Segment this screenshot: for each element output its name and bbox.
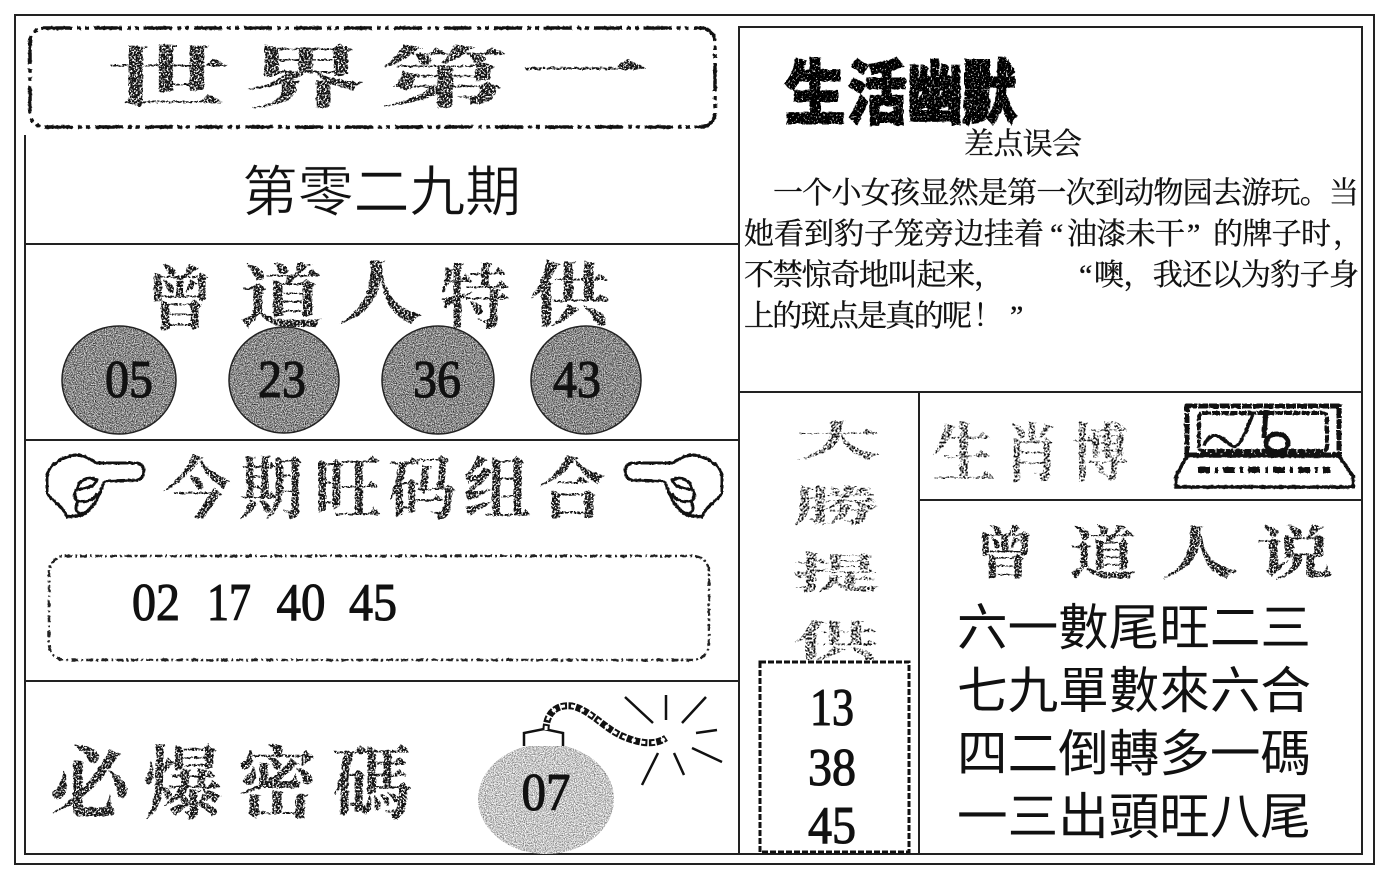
panel heading: 码 [388,452,456,528]
verse text: 六一數尾旺二三 [957,600,1311,656]
panel: 生活幽默 [744,54,1363,333]
story text: ” [1187,218,1200,251]
title text: 第 [380,42,510,117]
panel: 大勝提供 [760,419,909,855]
story text: “ [1079,259,1092,292]
numbers: 38 [808,739,856,797]
story text: ， [1333,218,1363,251]
panel heading [50,742,412,830]
number ball 05: 05 [105,351,153,409]
story text: 油漆未干 [1067,218,1185,251]
subtitle: 差点误会 [964,128,1082,161]
title text: 界 [245,42,367,117]
panel heading: 特 [440,261,510,338]
panel heading: 爆 [142,742,223,830]
panel heading: 道 [240,260,324,337]
panel heading: 曾 [147,261,213,339]
verse text: 四二倒轉多一碼 [957,726,1311,782]
combination numbers: 02 [132,574,180,632]
vertical heading: 勝 [793,484,879,530]
panel heading: 肖 [1005,419,1059,490]
story text [744,177,1363,333]
number ball 36 [382,326,494,434]
panel heading [932,419,1129,491]
number ball 23: 23 [258,351,306,409]
numbers [808,679,856,855]
panel heading: 合 [538,452,606,528]
number ball 43 [531,326,641,434]
story text: 噢，我还以为豹子身 [1094,259,1359,292]
panel heading [147,256,615,339]
story text: ” [1010,300,1023,333]
panel heading: 道 [1070,522,1136,587]
icon: bomb: 07 [522,764,570,822]
title text: 一 [520,36,650,111]
panel heading: 活 [847,54,907,133]
panel heading [163,452,606,528]
panel heading: 旺 [314,452,382,528]
dashed number box [760,662,909,852]
panel heading: 幽 [907,56,963,133]
combination numbers: 17 [207,574,251,632]
verse text [957,600,1311,845]
panel heading: 今 [163,452,231,528]
vertical heading: 大 [795,419,881,465]
icon: bomb [478,695,722,854]
panel heading: 生 [785,55,845,133]
story text: 她看到豹子笼旁边挂着 [744,218,1044,251]
panel heading: 组 [463,452,531,528]
icon: computer [1176,406,1353,487]
panel: 今期旺码组合 [47,452,722,660]
numbers: 13 [810,679,854,737]
combination numbers [132,574,397,632]
vertical heading: 供 [793,619,884,665]
combination numbers: 45 [349,574,397,632]
panel heading: 人 [1160,523,1238,587]
panel heading: 默 [961,56,1017,133]
story text: 的牌子时 [1213,218,1331,251]
icon: right pointing hand [625,455,722,517]
panel: 必爆密碼 [50,695,722,854]
panel heading: 密 [237,742,320,830]
story text: 一个小女孩显然是第一次到动物园去游玩。当 [773,177,1359,210]
title text [107,36,650,117]
number ball 23 [229,327,339,433]
panel heading: 说 [1255,523,1333,587]
icon: left pointing hand [47,455,144,517]
story text: “ [1050,218,1063,251]
issue number heading: 第零二九期 [242,161,521,223]
panel heading: 人 [336,256,424,334]
panel heading [785,54,1017,133]
story text: ！ [973,300,1003,333]
number ball 43: 43 [553,351,601,409]
vertical heading [793,419,884,665]
vertical heading: 提 [793,551,879,597]
panel heading: 生 [932,419,996,490]
panel heading: 博 [1071,420,1129,491]
panel heading: 期 [239,454,303,528]
story text: 不禁惊奇地叫起来， [744,259,1004,292]
number ball 36: 36 [413,351,461,409]
combination numbers: 40 [276,574,326,632]
panel: 曾道人特供 numbers [62,256,641,434]
verse text: 一三出頭旺八尾 [957,789,1311,845]
verse text: 七九單數來六合 [957,663,1311,719]
story text: 上的斑点是真的呢 [744,300,972,333]
panel: 生肖博 [932,406,1353,491]
panel heading: 供 [530,259,615,336]
numbers: 45 [808,797,856,855]
panel heading: 碼 [332,742,412,830]
number ball 05 [62,326,176,434]
panel heading [976,522,1333,587]
panel: 曾道人说 [957,522,1333,845]
dashed number box [49,556,709,660]
panel heading: 必 [50,742,136,830]
title text: 世 [107,42,229,117]
panel: title banner [30,28,715,127]
panel heading: 曾 [976,522,1034,587]
